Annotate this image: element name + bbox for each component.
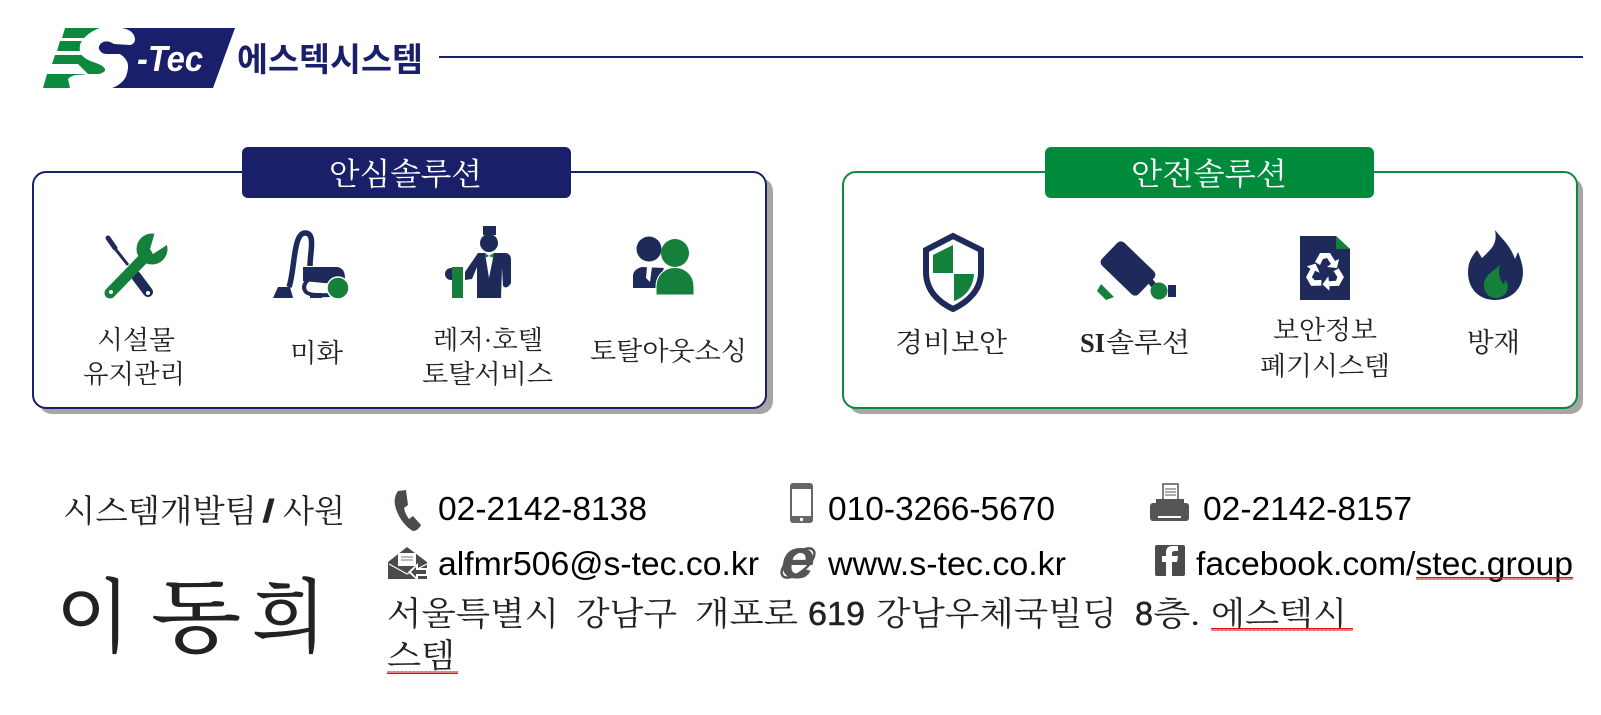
text: office address: 강남구 (576, 596, 677, 633)
panel heading: 안전솔루션 (1045, 147, 1374, 198)
text: office address: 에스텍시 (1211, 596, 1347, 633)
label: 미화: 미화 (290, 339, 343, 368)
label: 방재: 방재 (1467, 328, 1520, 358)
text: office address: 개포로 (695, 596, 798, 633)
icon: flame (1468, 230, 1523, 300)
label: SI솔루션: 솔루션 (1106, 328, 1190, 358)
label: 보안정보 폐기시스템: 폐기시스템 (1260, 352, 1390, 381)
text: office address: 층. (1153, 597, 1200, 633)
label: 시설물 유지관리: 유지관리 (83, 360, 185, 389)
logo wordmark: 에스텍시스템 (237, 41, 423, 78)
icon: mobile phone (790, 483, 813, 523)
text: department and title (63, 493, 345, 529)
text: office address: 8 (1135, 595, 1153, 632)
icon: vacuum cleaner (273, 233, 349, 299)
icon: internet explorer: e (781, 527, 815, 590)
text: facebook address: facebook.com/stec.group (1196, 545, 1573, 582)
panel heading: 안심솔루션: 안심솔루션 (329, 157, 482, 192)
text: website: www.s-tec.co.kr (827, 545, 1066, 582)
panel: 안심솔루션 (33, 147, 773, 414)
text: office address (387, 595, 1353, 675)
label: 시설물 유지관리 (83, 326, 185, 389)
text: name: 희 (252, 575, 326, 663)
label: 토탈아웃소싱: 토탈아웃소싱 (590, 337, 747, 366)
text: office address: 스템 (387, 638, 455, 675)
text: department and title: 시스템개발팀 (63, 493, 257, 529)
logo: S-Tec (43, 28, 235, 88)
icon: email (388, 547, 428, 581)
icon: wrench and screwdriver (108, 232, 170, 295)
panel heading: 안심솔루션 (242, 147, 571, 198)
panel heading: 안전솔루션: 안전솔루션 (1131, 157, 1287, 192)
text: office address: 619 (808, 595, 865, 632)
text: office address: 강남우체국빌딩 (876, 596, 1117, 633)
icon: recycling document (1300, 236, 1350, 300)
label: 레저·호텔 토탈서비스: 레저·호텔 (433, 326, 543, 355)
icon: fax (1150, 484, 1189, 521)
icon: telephone (395, 490, 421, 531)
text: phone number: 02-2142-8138 (438, 491, 647, 528)
icon: facebook (1155, 545, 1185, 576)
text: email address: alfmr506@s-tec.co.kr (438, 545, 759, 582)
label: SI솔루션: SI (1080, 328, 1105, 358)
label: 레저·호텔 토탈서비스: 토탈서비스 (422, 360, 553, 389)
label: 보안정보 폐기시스템: 보안정보 (1273, 316, 1377, 345)
label: 레저·호텔 토탈서비스 (422, 326, 553, 389)
label: 경비보안: 경비보안 (895, 328, 1007, 358)
text: fax number: 02-2142-8157 (1203, 491, 1412, 528)
label: 보안정보 폐기시스템 (1260, 316, 1390, 381)
logo: S-Tec: -Tec (137, 38, 203, 79)
icon: shield (926, 236, 981, 309)
label: 시설물 유지관리: 시설물 (97, 326, 175, 355)
text: name: 동 (151, 575, 241, 663)
text: office address: 서울특별시 (387, 596, 559, 633)
text: department and title: / (262, 493, 275, 529)
icon: hotel bellhop (445, 226, 511, 298)
text: name (56, 575, 326, 663)
panel: 안전솔루션 (843, 147, 1583, 414)
text: name: 이 (56, 575, 130, 663)
icon: two people (633, 236, 694, 295)
icon: CCTV camera (1097, 239, 1176, 300)
text: mobile number: 010-3266-5670 (828, 491, 1055, 528)
text: department and title: 사원 (283, 493, 345, 529)
